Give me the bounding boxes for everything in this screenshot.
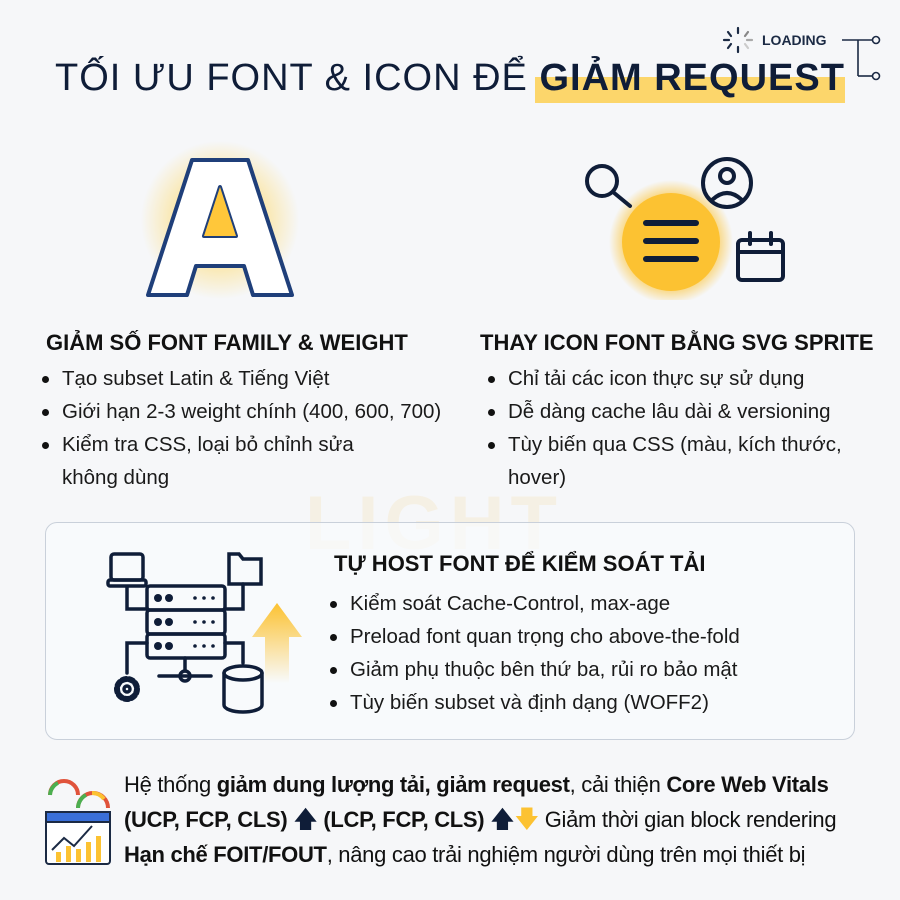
panel: icons	[480, 330, 874, 489]
panel: icons: hover)	[508, 466, 566, 489]
heading: self-host: TỰ HOST FONT ĐỂ KIỂM SOÁT TẢI	[334, 551, 705, 576]
panel: fonts: Giới hạn 2-3 weight chính (400, 600, 700)	[62, 400, 441, 423]
panel: self-host	[45, 522, 855, 740]
loading indicator	[722, 26, 880, 80]
panel: icons: Chỉ tải các icon thực sự sử dụng	[508, 367, 804, 390]
panel: self-host: Giảm phụ thuộc bên thứ ba, rủi ro bảo mật	[350, 658, 738, 681]
summary text: (UCP, FCP, CLS) 🡅 (LCP, FCP, CLS) 🡅🡇 Giảm thời gian block rendering	[124, 806, 836, 833]
panel: self-host: Kiểm soát Cache-Control, max-age	[350, 592, 670, 615]
panel: fonts: Kiểm tra CSS, loại bỏ chỉnh sửa	[62, 433, 354, 456]
icon: server network	[106, 552, 264, 714]
panel: self-host: Tùy biến subset và định dạng (WOFF2)	[350, 691, 709, 714]
icon: svg sprite icons	[585, 157, 785, 300]
panel: icons: Dễ dàng cache lâu dài & versioning	[508, 400, 831, 423]
panel: fonts	[42, 330, 441, 489]
arrow: up	[252, 603, 302, 680]
summary text: Hạn chế FOIT/FOUT, nâng cao trải nghiệm người dùng trên mọi thiết bị	[124, 842, 805, 867]
title: TỐI ƯU FONT & ICON ĐỂ GIẢM REQUEST	[55, 57, 845, 99]
loading indicator: LOADING	[762, 32, 827, 48]
icon: letter A	[144, 144, 296, 297]
panel: self-host: Preload font quan trọng cho above-the-fold	[350, 625, 740, 648]
panel: fonts: không dùng	[62, 466, 169, 489]
heading: icons: THAY ICON FONT BẰNG SVG SPRITE	[480, 330, 874, 355]
summary text	[124, 772, 836, 867]
watermark: LIGHT	[305, 481, 563, 566]
icon: dashboard	[45, 779, 111, 865]
panel: icons: Tùy biến qua CSS (màu, kích thước,	[508, 433, 842, 456]
summary text: Hệ thống giảm dung lượng tải, giảm request, cải thiện Core Web Vitals	[124, 772, 829, 797]
panel: fonts: Tạo subset Latin & Tiếng Việt	[62, 367, 329, 390]
heading: fonts: GIẢM SỐ FONT FAMILY & WEIGHT	[46, 330, 408, 355]
